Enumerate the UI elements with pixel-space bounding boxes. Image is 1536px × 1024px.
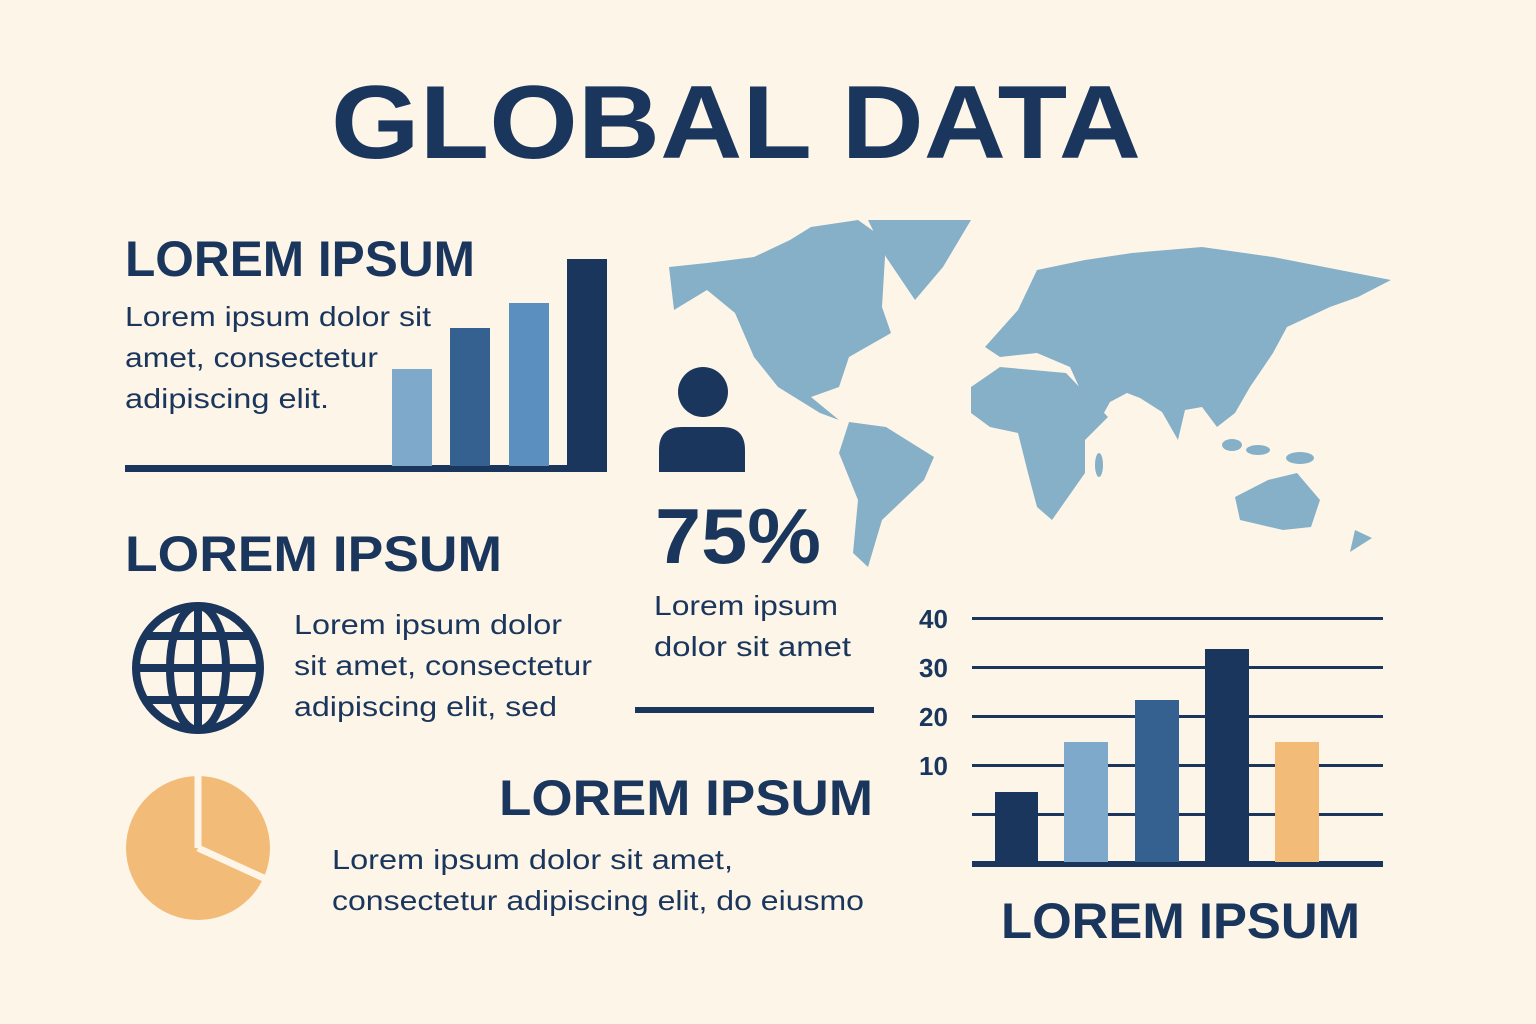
text block 3: consectetur adipiscing elit, do eiusmo — [332, 885, 864, 916]
stat caption — [654, 590, 851, 662]
axis labels: 20 — [919, 702, 948, 732]
icon: person — [659, 367, 745, 472]
stat caption: Lorem ipsum — [654, 590, 838, 621]
panel: top-left bar section — [125, 231, 607, 472]
text block 1 — [125, 301, 431, 414]
heading 4: LOREM IPSUM — [1001, 893, 1360, 949]
text block 2 — [294, 609, 592, 722]
text block 1: adipiscing elit. — [125, 383, 329, 414]
bar chart large — [919, 604, 1383, 867]
axis labels — [919, 604, 948, 781]
text block 2: sit amet, consectetur — [294, 650, 592, 681]
axis labels: 40 — [919, 604, 948, 634]
text block 3 — [332, 844, 864, 916]
text block 2: Lorem ipsum dolor — [294, 609, 562, 640]
stat caption: dolor sit amet — [654, 631, 851, 662]
bar chart small — [125, 259, 607, 472]
heading 3: LOREM IPSUM — [499, 770, 873, 826]
bars — [995, 649, 1319, 862]
title: GLOBAL DATA — [331, 65, 1141, 181]
axis labels: 10 — [919, 751, 948, 781]
text block 2: adipiscing elit, sed — [294, 691, 557, 722]
world map — [669, 220, 1391, 567]
text block 3: Lorem ipsum dolor sit amet, — [332, 844, 733, 875]
icon: pie chart — [126, 772, 270, 920]
icon: globe — [136, 606, 260, 730]
text block 1: amet, consectetur — [125, 342, 378, 373]
text block 1: Lorem ipsum dolor sit — [125, 301, 431, 332]
stat: 75%: 75% — [655, 492, 821, 580]
heading 1: LOREM IPSUM — [125, 231, 475, 287]
heading 2: LOREM IPSUM — [125, 526, 502, 582]
axis labels: 30 — [919, 653, 948, 683]
